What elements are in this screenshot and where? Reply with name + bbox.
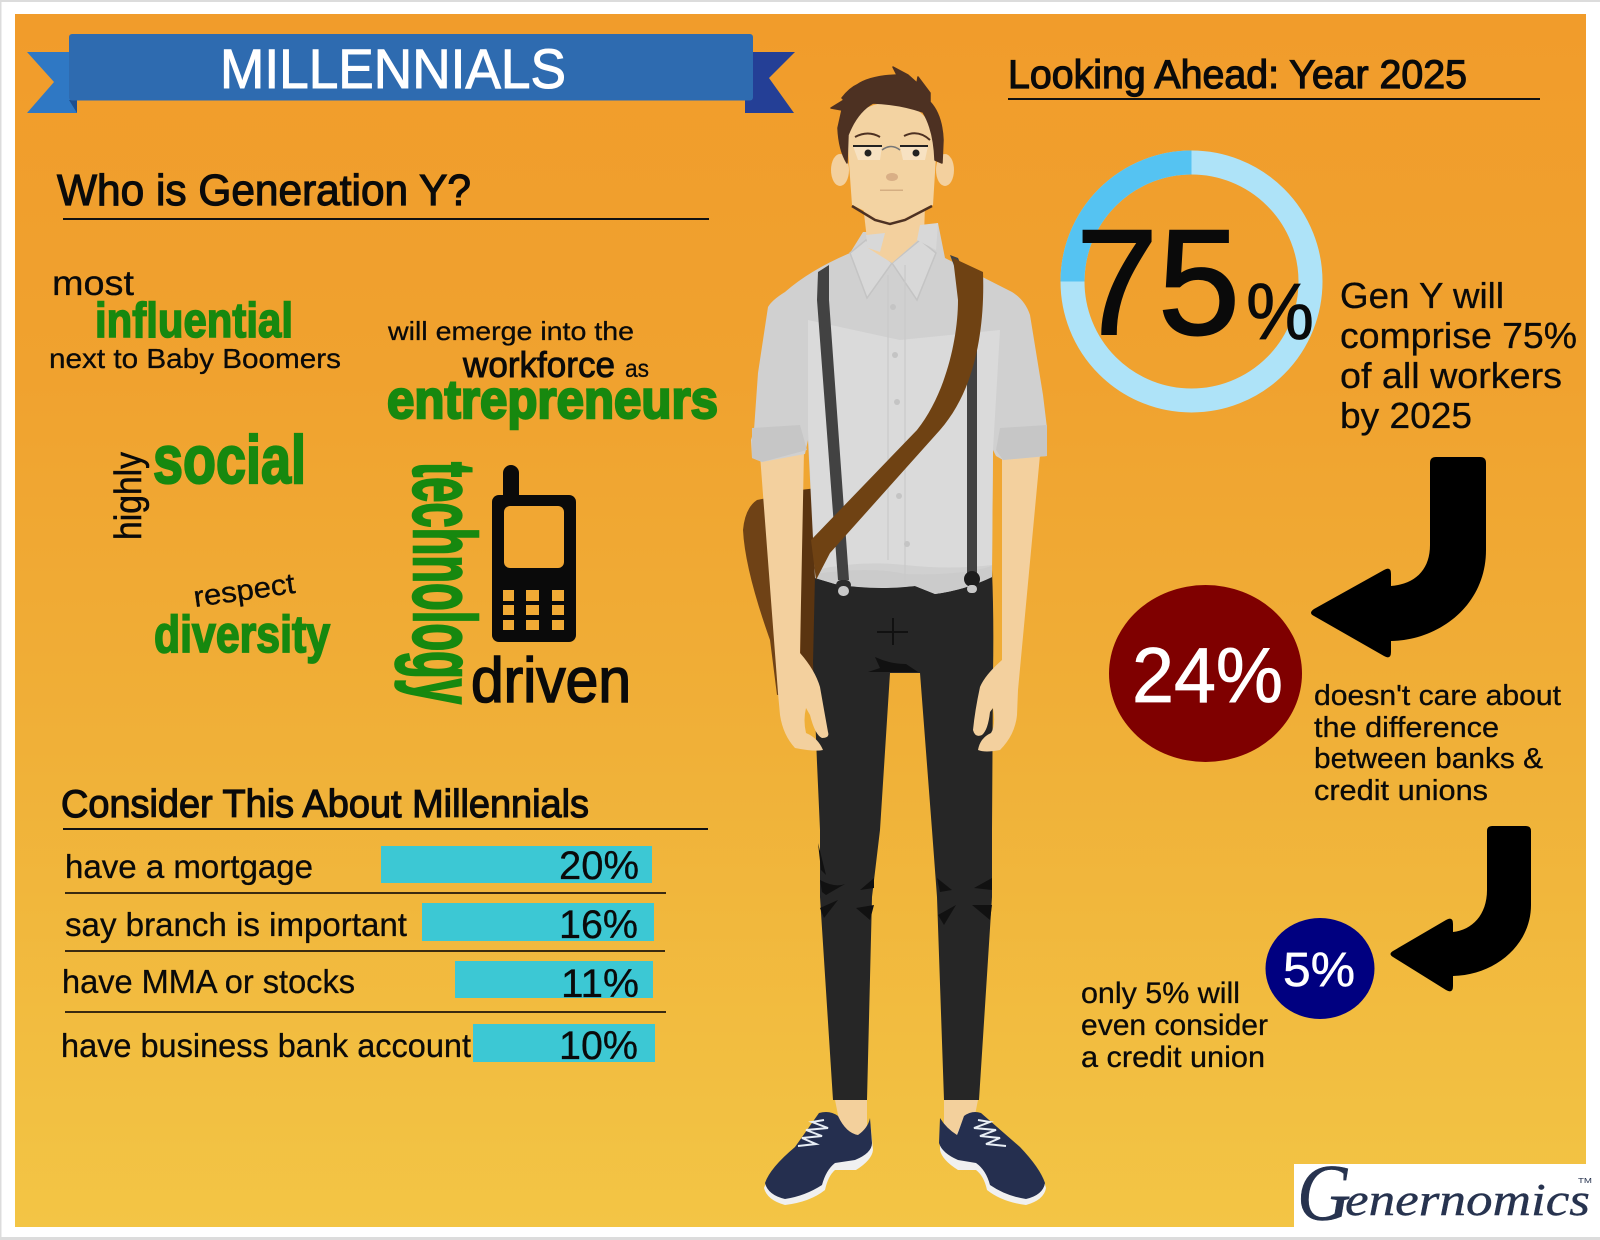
shoes bbox=[764, 1112, 1046, 1205]
text: 5% description bbox=[1081, 977, 1268, 1074]
text: 24% description: the difference bbox=[1314, 712, 1499, 744]
ankles bbox=[834, 1095, 979, 1137]
text: 75% of workers: Gen Y will bbox=[1340, 275, 1504, 316]
phrase: technology driven: driven bbox=[471, 646, 631, 716]
row: mortgage 20% bbox=[65, 844, 652, 888]
stat: 24% circle bbox=[1109, 585, 1302, 762]
heading: looking ahead: Looking Ahead: Year 2025 bbox=[1008, 53, 1467, 97]
text: 75% of workers: comprise 75% bbox=[1340, 315, 1577, 356]
text: 24% description: between banks & bbox=[1314, 743, 1543, 775]
shirt placket and buttons bbox=[888, 265, 910, 585]
text: 75% of workers bbox=[1340, 275, 1577, 436]
collar bbox=[850, 240, 936, 300]
arms and hands bbox=[760, 450, 1040, 752]
heading: who is generation Y: Who is Generation Y? bbox=[57, 166, 471, 215]
phrase: most influential bbox=[49, 264, 341, 374]
title text: MILLENNIALS bbox=[220, 37, 566, 100]
logo: Genernomics: G bbox=[1297, 1150, 1351, 1238]
row: business account 10% bbox=[61, 1024, 655, 1068]
section: looking ahead bbox=[1008, 53, 1577, 1074]
phrase: entrepreneurs: entrepreneurs bbox=[387, 370, 718, 430]
phrase: most influential: next to Baby Boomers bbox=[49, 343, 341, 374]
neck bbox=[863, 205, 925, 263]
stat: 5% circle: 5% bbox=[1283, 944, 1355, 997]
icon: mobile phone bbox=[492, 465, 576, 642]
phrase: technology driven: technology bbox=[395, 462, 494, 704]
logo: Genernomics: TM bbox=[1578, 1178, 1592, 1185]
glasses and eyes bbox=[853, 133, 930, 160]
chart: 75% ring: 75 bbox=[1076, 198, 1240, 366]
row: branch 16%: say branch is important bbox=[65, 906, 407, 943]
text: 75% of workers: by 2025 bbox=[1340, 395, 1472, 436]
phrase: highly social: highly bbox=[108, 452, 150, 540]
title banner bbox=[27, 34, 795, 113]
logo: Genernomics bbox=[1294, 1150, 1600, 1238]
chart: 75% ring bbox=[1072, 162, 1314, 400]
section: consider this about millennials bbox=[61, 783, 708, 1068]
row: branch 16%: 16% bbox=[559, 903, 638, 947]
text: 24% description bbox=[1314, 680, 1561, 807]
text: 75% of workers: of all workers bbox=[1340, 355, 1562, 396]
row: mortgage 20%: 20% bbox=[559, 844, 639, 888]
illustration: young man bbox=[743, 67, 1047, 1205]
row: business account 10%: 10% bbox=[559, 1024, 638, 1068]
row: business account 10%: have business bank account bbox=[61, 1027, 471, 1064]
heading: consider this: Consider This About Millennials bbox=[61, 783, 589, 826]
bag strap bbox=[811, 258, 983, 580]
bag bbox=[743, 488, 820, 695]
arrow: to 5% bbox=[1390, 826, 1531, 991]
text: 24% description: doesn't care about bbox=[1314, 680, 1561, 712]
phrase: respect diversity: respect bbox=[192, 568, 297, 614]
stat: 5% circle bbox=[1266, 918, 1374, 1019]
row: mortgage 20%: have a mortgage bbox=[65, 848, 313, 885]
shirt bbox=[751, 223, 1047, 594]
text: 24% description: credit unions bbox=[1314, 775, 1488, 807]
section: who is generation Y bbox=[49, 166, 718, 716]
phrase: entrepreneurs: will emerge into the bbox=[387, 316, 634, 346]
text: 5% description: only 5% will bbox=[1081, 977, 1240, 1010]
row: branch 16% bbox=[65, 903, 654, 947]
phrase: most influential: influential bbox=[95, 294, 293, 348]
row: MMA 11%: 11% bbox=[561, 962, 639, 1006]
trousers bbox=[813, 570, 993, 1100]
phrase: entrepreneurs bbox=[387, 316, 718, 430]
arrow: to 24% bbox=[1311, 457, 1486, 657]
phrase: highly social bbox=[108, 422, 306, 540]
text: 5% description: a credit union bbox=[1081, 1041, 1265, 1074]
phrase: entrepreneurs: workforce bbox=[462, 344, 615, 385]
phrase: respect diversity: diversity bbox=[154, 606, 330, 664]
stat: 24% circle: 24% bbox=[1132, 631, 1283, 719]
head bbox=[831, 67, 954, 224]
phrase: highly social: social bbox=[153, 422, 306, 498]
trouser details bbox=[818, 618, 992, 925]
shirt shading bbox=[808, 320, 1000, 594]
phrase: most influential: most bbox=[52, 264, 134, 303]
phrase: respect diversity bbox=[154, 568, 330, 664]
logo: Genernomics: enernomics bbox=[1345, 1174, 1590, 1225]
row: MMA 11%: have MMA or stocks bbox=[62, 963, 355, 1000]
row: MMA 11% bbox=[62, 961, 653, 1006]
phrase: technology driven bbox=[395, 462, 631, 716]
text: 5% description: even consider bbox=[1081, 1009, 1268, 1042]
chart: 75% ring: % bbox=[1246, 267, 1314, 356]
hair bbox=[831, 67, 943, 163]
phrase: entrepreneurs: as bbox=[625, 355, 649, 383]
suspenders bbox=[817, 255, 980, 596]
